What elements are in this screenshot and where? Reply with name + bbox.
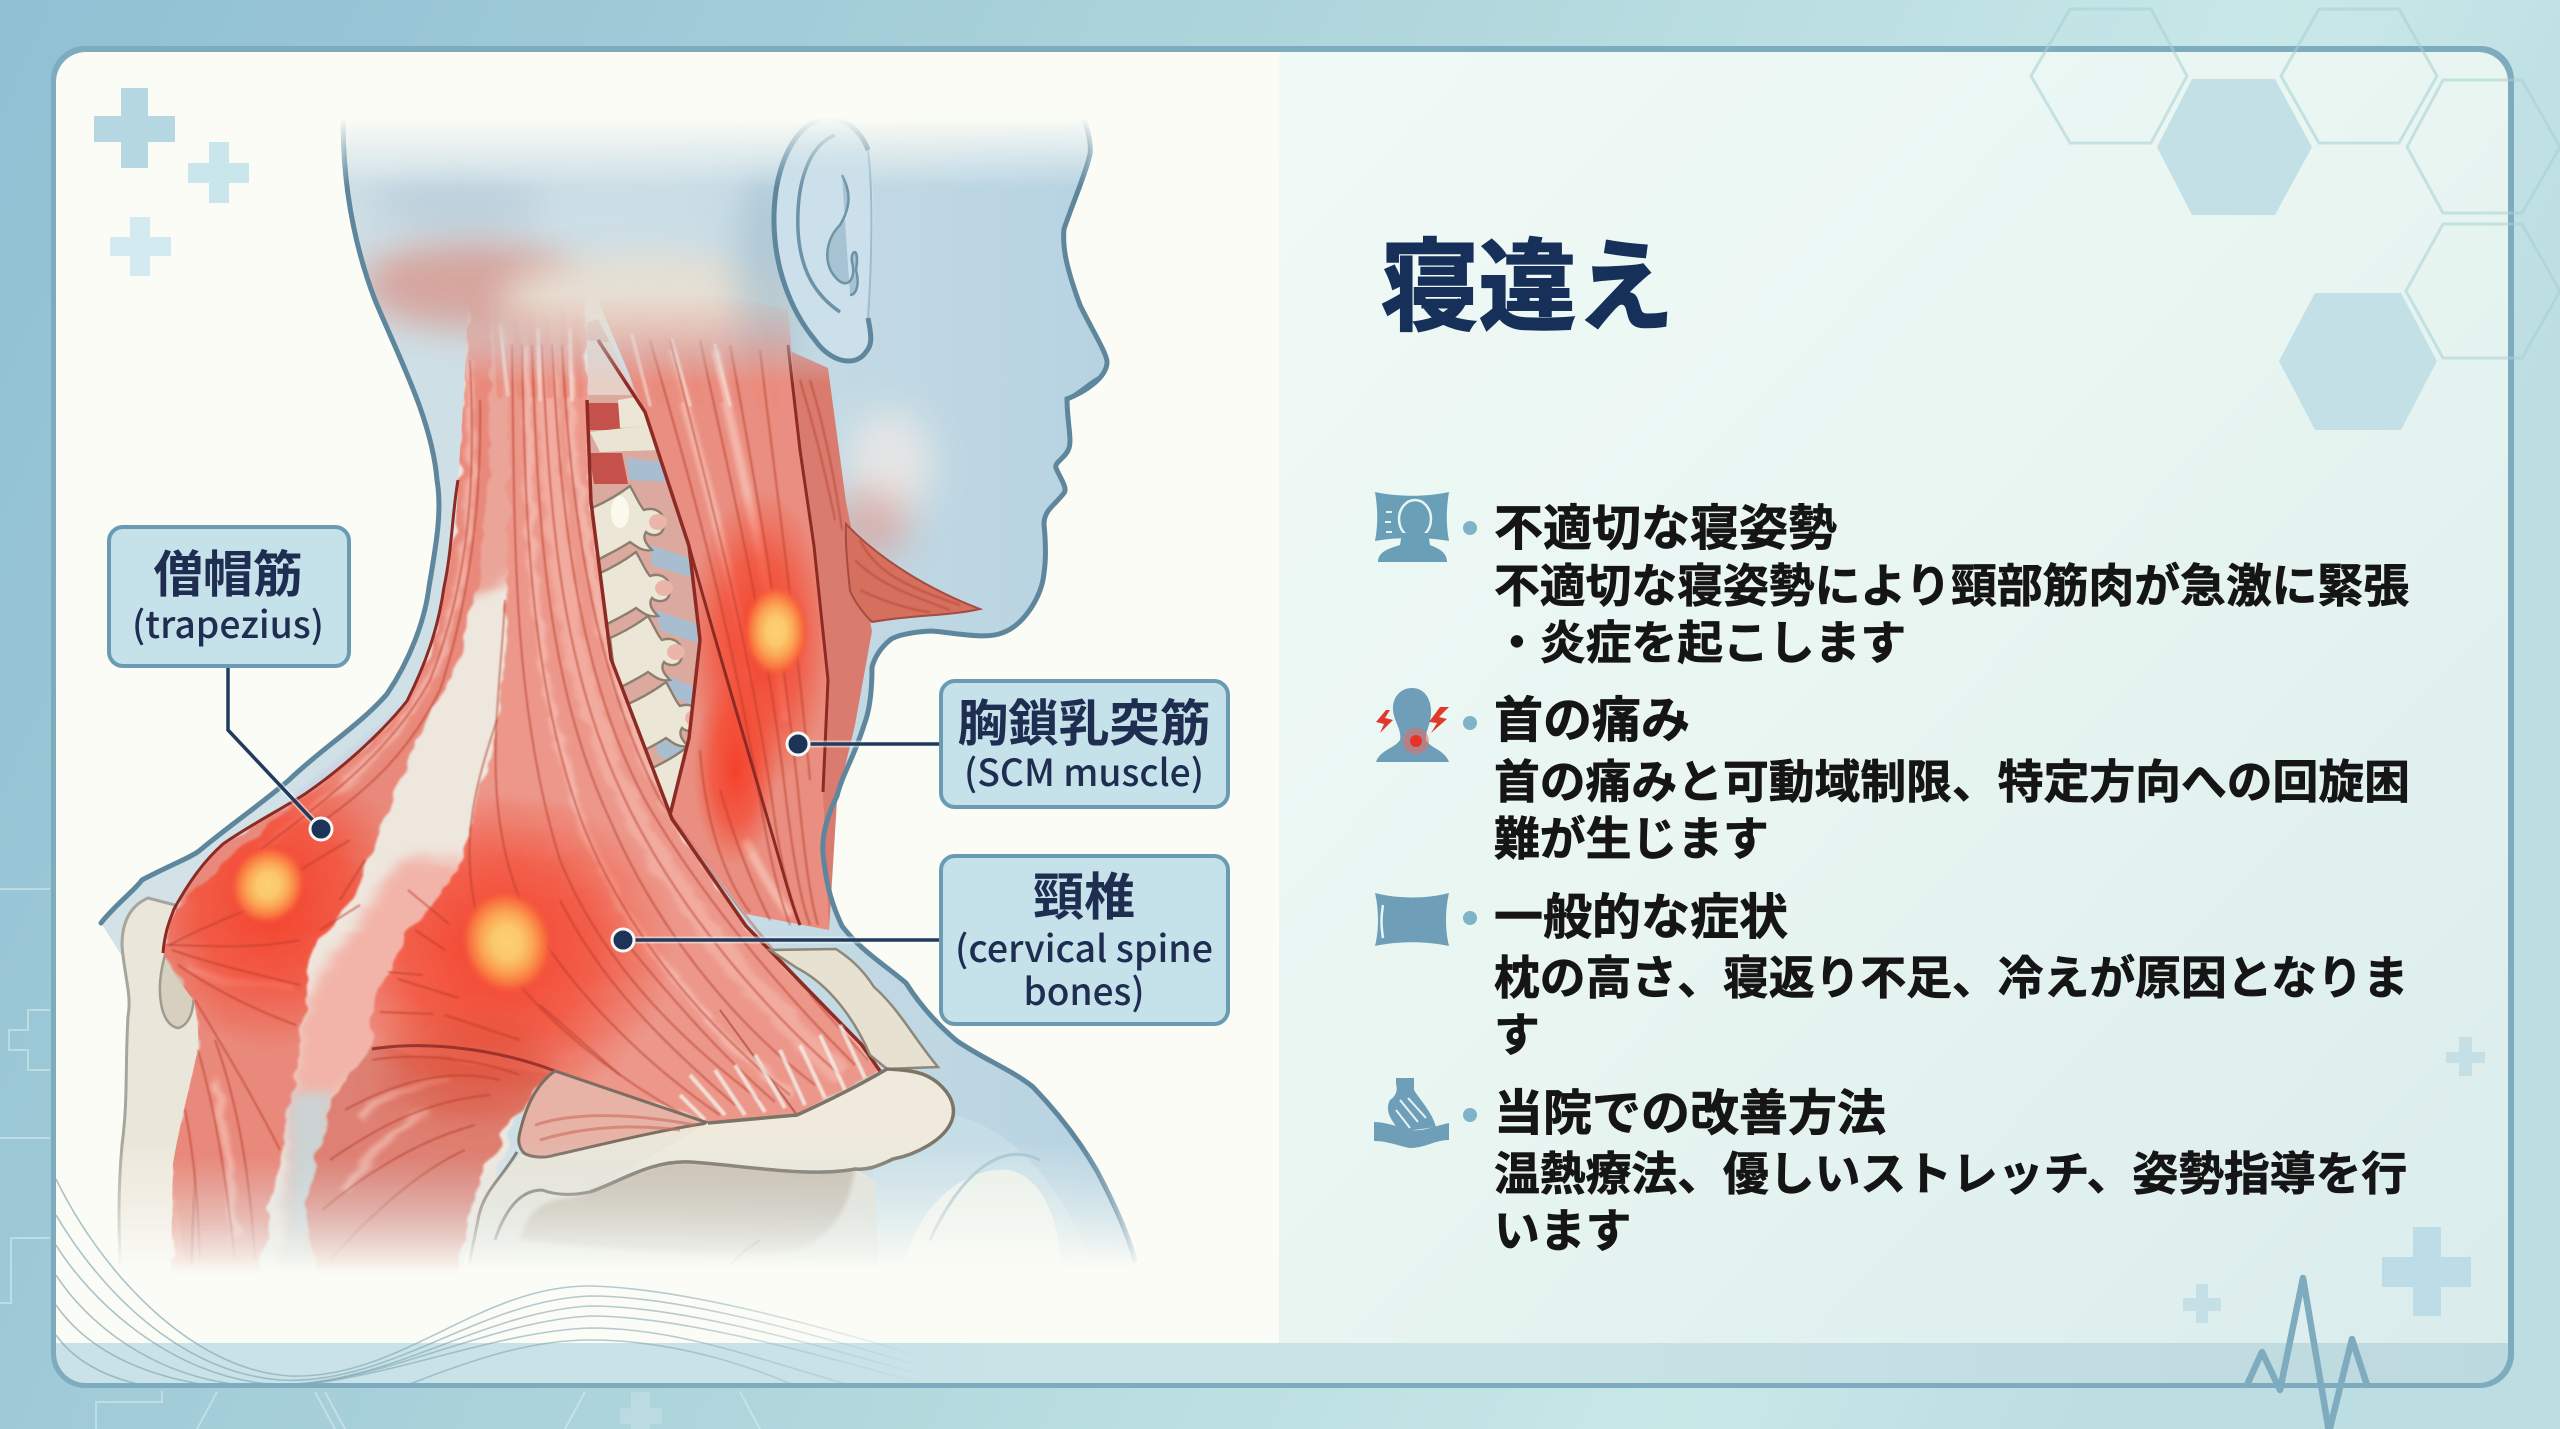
callout: cervical spine: (cervical spine xyxy=(955,919,1213,973)
description: います xyxy=(1494,1206,1631,1257)
muscle: sternocleidomastoid xyxy=(598,290,832,930)
bullet xyxy=(1463,521,1477,535)
description xyxy=(1494,1149,2407,1257)
muscle: outer scalene behind SCM xyxy=(788,350,872,930)
muscle borders xyxy=(163,340,880,1123)
callout: SCM muscle xyxy=(787,681,1228,807)
heading: 不適切な寝姿勢 xyxy=(1494,502,1837,556)
icon: pillow and person xyxy=(1375,492,1449,562)
description: 首の痛みと可動域制限、特定方向への回旋困 xyxy=(1494,757,2410,808)
callout: SCM muscle: (SCM muscle) xyxy=(964,743,1204,797)
muscle group with feathered edges xyxy=(137,270,880,1300)
hot spots xyxy=(216,584,809,1005)
description: す xyxy=(1494,1010,1540,1061)
left shoulder bone xyxy=(119,898,200,1300)
description xyxy=(1494,561,2409,669)
heading: 当院での改善方法 xyxy=(1494,1087,1886,1141)
callout: SCM muscle: 胸鎖乳突筋 xyxy=(958,684,1210,756)
description: ・炎症を起こします xyxy=(1494,618,1906,669)
callout: cervical spine: bones) xyxy=(1024,962,1144,1016)
description xyxy=(1494,953,2409,1061)
list item 1: improper sleeping posture xyxy=(1375,492,2409,669)
callout: cervical spine xyxy=(612,856,1228,1024)
illustration: neck and shoulder anatomy xyxy=(101,110,1135,1300)
skin shading xyxy=(360,170,932,561)
fibres: dark lines xyxy=(165,340,960,1260)
description: 枕の高さ、寝返り不足、冷えが原因となりま xyxy=(1494,953,2409,1004)
tendon: clavicle fringe xyxy=(680,1025,865,1120)
muscle: central trapezius xyxy=(367,280,880,1123)
bullet xyxy=(1463,716,1477,730)
list item 4: treatment at clinic xyxy=(1374,1078,2407,1257)
icon: pillow xyxy=(1375,893,1449,946)
heading: 一般的な症状 xyxy=(1494,891,1788,945)
callout: trapezius xyxy=(109,527,349,840)
muscles xyxy=(137,270,980,1300)
callout: trapezius: (trapezius) xyxy=(132,595,324,649)
shoulder: rear humerus xyxy=(967,1120,1058,1197)
muscle: left shoulder xyxy=(163,280,491,1300)
callout: cervical spine: 頸椎 xyxy=(1033,856,1135,930)
decoration: hexagons xyxy=(2031,9,2560,430)
decoration: wave lines xyxy=(56,1179,940,1388)
head and neck skin xyxy=(101,110,1135,1300)
fibres: pale streaks xyxy=(185,345,872,1240)
heading: 首の痛み xyxy=(1494,694,1690,748)
scapula and clavicle bones xyxy=(465,949,954,1300)
background decorations: outer line pattern xyxy=(0,889,760,1429)
ear xyxy=(774,118,873,361)
list item 2: neck pain xyxy=(1376,688,2410,865)
tendon underlay xyxy=(192,322,830,1232)
vertebrae window xyxy=(586,319,698,808)
description: 温熱療法、優しいストレッチ、姿勢指導を行 xyxy=(1494,1149,2407,1200)
title: 寝違え xyxy=(1381,206,1674,351)
fibres: top fringe xyxy=(473,324,732,408)
icon: treating hands xyxy=(1374,1078,1449,1148)
description xyxy=(1494,757,2410,865)
ECG heartbeat line xyxy=(2247,1278,2367,1429)
description: 不適切な寝姿勢により頸部筋肉が急激に緊張 xyxy=(1494,561,2409,612)
list item 3: common symptoms xyxy=(1375,891,2409,1061)
icon: neck pain xyxy=(1376,688,1449,762)
heat glow on muscles xyxy=(164,778,666,1127)
muscle: lower central xyxy=(304,1045,552,1266)
muscle: jaw triangle xyxy=(846,524,980,622)
callout: trapezius: 僧帽筋 xyxy=(154,535,302,607)
bullet xyxy=(1463,911,1477,925)
description: 難が生じます xyxy=(1494,814,1769,865)
body outline xyxy=(101,112,1135,1260)
bullet xyxy=(1463,1108,1477,1122)
